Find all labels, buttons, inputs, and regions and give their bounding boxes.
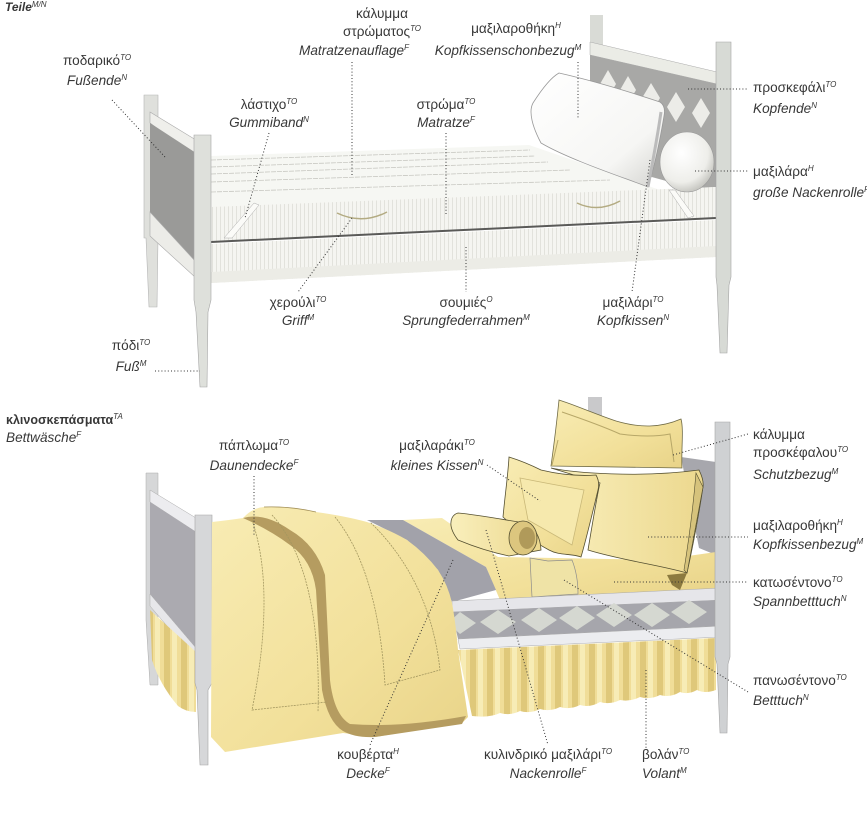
label: spring frame: Sprungfederrahmen — [402, 313, 523, 328]
label: neck roll: ΤΟ — [601, 747, 612, 756]
label: valance: M — [680, 766, 687, 775]
small pillow — [503, 457, 599, 557]
label: mattress cover — [299, 6, 421, 58]
label: footboard — [63, 53, 131, 88]
label: pillow sham: Schutzbezug — [753, 467, 832, 482]
label: pillow case — [753, 518, 864, 552]
label: foot: Fuß — [116, 359, 140, 374]
heading: bed linen: Bettwäsche — [6, 430, 76, 445]
label: pillow sham — [753, 427, 848, 482]
label: fitted sheet: ΤΟ — [832, 575, 843, 584]
back post and headboard — [588, 397, 716, 555]
label: blanket: Η — [393, 747, 399, 756]
grey runner — [367, 520, 496, 602]
label: headboard: Kopfende — [753, 101, 811, 116]
label: pillow case: M — [857, 537, 864, 546]
label: headboard: N — [811, 101, 817, 110]
label: fitted sheet: κατωσέντονο — [753, 575, 832, 590]
label: blanket — [337, 747, 399, 781]
label: headboard — [753, 80, 836, 116]
label: duvet: πάπλωμα — [219, 438, 278, 453]
mattress handle — [337, 212, 387, 219]
label: large bolster: Η — [808, 164, 814, 173]
label: large bolster: große Nackenrolle — [753, 185, 864, 200]
bolster pillow white — [660, 132, 714, 192]
label: fitted sheet: N — [841, 594, 847, 603]
label: fitted sheet: Spannbetttuch — [753, 594, 841, 609]
label: mattress — [417, 97, 476, 130]
label: mattress: F — [470, 115, 476, 124]
seam line — [211, 218, 716, 242]
label: small pillow: μαξιλαράκι — [399, 438, 464, 453]
label: footboard: Fußende — [67, 73, 121, 88]
label: handle: Griff — [282, 313, 308, 328]
flat sheet fold — [530, 558, 578, 597]
label: footboard: ΤΟ — [120, 53, 131, 62]
label: elastic band: λάστιχο — [241, 97, 286, 112]
label: neck roll: Nackenrolle — [510, 766, 581, 781]
foot panel — [150, 112, 196, 278]
heading: bed linen: ΤΑ — [113, 412, 123, 421]
right post and leg — [715, 422, 730, 733]
large front pillow — [551, 468, 703, 573]
heading: Teile: Teile — [5, 0, 32, 14]
label: elastic band: Gummiband — [229, 115, 303, 130]
headboard — [590, 15, 717, 195]
label: pillow protector — [435, 21, 582, 58]
label: foot: πόδι — [112, 338, 139, 353]
label: pillow — [597, 295, 669, 328]
spring frame — [211, 220, 716, 283]
label: pillow protector: μαξιλαροθήκη — [471, 21, 555, 36]
label: pillow case: Kopfkissenbezug — [753, 537, 857, 552]
heading: bed linen: κλινοσκεπάσματα — [6, 413, 113, 427]
label: flat sheet: N — [803, 693, 809, 702]
label: pillow: Kopfkissen — [597, 313, 663, 328]
label: pillow: N — [663, 313, 669, 322]
label: footboard: N — [121, 73, 127, 82]
heading: bed linen: F — [76, 430, 82, 439]
label: spring frame: M — [523, 313, 530, 322]
heading: bed linen — [6, 412, 123, 445]
label: valance: βολάν — [642, 747, 678, 762]
far left post and leg — [144, 95, 158, 307]
label: mattress cover: στρώματος — [343, 24, 410, 39]
label: pillow sham: κάλυμμα — [753, 427, 805, 442]
illustration: bare bed — [144, 15, 731, 387]
label: mattress cover: Matratzenauflage — [299, 43, 404, 58]
label: pillow sham: προσκέφαλου — [753, 445, 837, 460]
cylindrical bolster — [451, 513, 541, 556]
label: mattress cover: F — [404, 43, 410, 52]
duvet and blanket — [211, 507, 468, 752]
label: duvet: F — [294, 458, 300, 467]
elastic straps — [224, 190, 694, 238]
label: mattress cover: κάλυμμα — [356, 6, 408, 21]
label: spring frame: Ο — [486, 295, 493, 304]
label: footboard: ποδαρικό — [63, 53, 120, 68]
label: pillow: ΤΟ — [653, 295, 663, 304]
label: foot — [112, 338, 150, 374]
label: handle: χερούλι — [270, 295, 315, 310]
label: spring frame: σουμιές — [439, 295, 486, 310]
second handle — [577, 201, 620, 208]
label: headboard: ΤΟ — [825, 80, 836, 89]
label: small pillow: ΤΟ — [464, 438, 475, 447]
label: mattress: στρώμα — [417, 97, 464, 112]
label: foot: ΤΟ — [139, 338, 150, 347]
label: small pillow — [391, 438, 484, 473]
label: valance — [642, 747, 689, 781]
label: blanket: F — [385, 766, 391, 775]
label: neck roll — [484, 747, 612, 781]
illustration: made bed — [146, 397, 730, 765]
label: spring frame — [402, 295, 530, 328]
label: headboard: προσκεφάλι — [753, 80, 825, 95]
label: valance: ΤΟ — [678, 747, 689, 756]
label: large bolster — [753, 164, 867, 200]
far posts — [146, 473, 158, 685]
label: flat sheet — [753, 673, 847, 708]
label: elastic band: N — [303, 115, 309, 124]
label: handle — [270, 295, 326, 328]
near left post and leg — [195, 515, 212, 765]
label: pillow sham: M — [832, 467, 839, 476]
label: pillow case: μαξιλαροθήκη — [753, 518, 837, 533]
mattress cover — [211, 145, 716, 208]
label: pillow case: Η — [837, 518, 843, 527]
label: large bolster: μαξιλάρα — [753, 164, 808, 179]
label: pillow sham: ΤΟ — [837, 445, 848, 454]
fitted sheet — [403, 518, 716, 600]
label: pillow protector: Kopfkissenschonbezug — [435, 43, 575, 58]
label: flat sheet: πανωσέντονο — [753, 673, 836, 688]
label: small pillow: N — [478, 458, 484, 467]
label: duvet — [210, 438, 300, 473]
right post and leg — [716, 42, 731, 353]
mattress — [211, 187, 716, 243]
back pillow — [551, 400, 682, 468]
left ruffle — [150, 610, 196, 712]
label: elastic band — [229, 97, 309, 130]
label: blanket: κουβέρτα — [337, 747, 393, 762]
near left post and leg — [194, 135, 211, 387]
volant ruffle — [458, 638, 716, 717]
label: fitted sheet — [753, 575, 847, 609]
foot panel — [150, 490, 196, 660]
front rail — [448, 588, 721, 649]
label: duvet: Daunendecke — [210, 458, 294, 473]
label: mattress cover: ΤΟ — [410, 24, 421, 33]
label: elastic band: ΤΟ — [286, 97, 297, 106]
label: small pillow: kleines Kissen — [391, 458, 478, 473]
label: pillow protector: M — [575, 43, 582, 52]
label: handle: ΤΟ — [315, 295, 326, 304]
heading: Teile: M/N — [32, 0, 47, 9]
label: flat sheet: ΤΟ — [836, 673, 847, 682]
label: mattress: Matratze — [417, 115, 470, 130]
label: pillow: μαξιλάρι — [603, 295, 653, 310]
label: mattress: ΤΟ — [464, 97, 475, 106]
label: valance: Volant — [642, 766, 680, 781]
label: neck roll: F — [581, 766, 587, 775]
label: duvet: ΤΟ — [278, 438, 289, 447]
label: neck roll: κυλινδρικό μαξιλάρι — [484, 747, 601, 762]
label: blanket: Decke — [346, 766, 385, 781]
label: foot: M — [140, 359, 147, 368]
leader lines — [112, 62, 748, 748]
label: flat sheet: Betttuch — [753, 693, 803, 708]
label: pillow protector: Η — [555, 21, 561, 30]
white pillow — [531, 73, 664, 187]
label: handle: M — [308, 313, 315, 322]
